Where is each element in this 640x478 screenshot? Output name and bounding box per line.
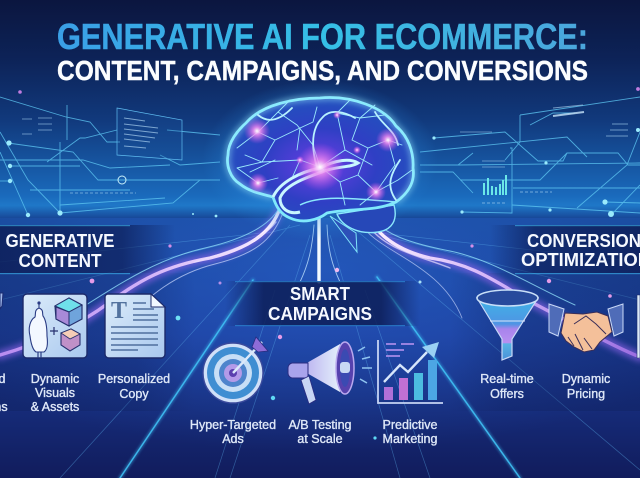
label: dynamic visuals and assets: & Assets: [31, 400, 79, 414]
circuit nodes: [6, 87, 640, 217]
label: predictive marketing: [383, 418, 437, 446]
brain: cerebrum outline: [228, 98, 413, 221]
label: predictive marketing: Predictive: [383, 418, 437, 432]
icon: handshake: [549, 304, 623, 352]
icon: dynamic visuals and assets: [23, 294, 87, 358]
sparkle nodes: [90, 244, 612, 440]
label: hyper-targeted ads: [190, 418, 276, 446]
heading: smart campaigns: SMART: [290, 284, 350, 304]
brain: stem: [330, 216, 357, 252]
mini data panels: [22, 105, 628, 203]
icon: target with arrow: [203, 337, 268, 403]
label: personalized copy: Copy: [119, 387, 149, 401]
label: personalized copy: Personalized: [98, 372, 170, 386]
label: hyper-targeted ads: Ads: [222, 432, 244, 446]
left panel: generative content backdrop: [0, 225, 195, 411]
label: dynamic pricing: [562, 372, 610, 401]
label: dynamic visuals and assets: Visuals: [35, 386, 75, 400]
brain: synapse glows: [296, 143, 344, 191]
heading: conversion optimization: [521, 231, 640, 270]
title: [57, 16, 588, 86]
label: a/b testing at scale: A/B Testing: [288, 418, 352, 432]
label: dynamic visuals and assets: Dynamic: [31, 372, 79, 386]
label: dynamic pricing: Pricing: [567, 387, 605, 401]
bright diagonal light beams: [120, 277, 520, 478]
heading: generative content: [6, 231, 114, 271]
label: a/b testing at scale: [288, 418, 352, 446]
label: personalized copy: [98, 372, 170, 401]
label: dynamic pricing: Dynamic: [562, 372, 610, 386]
icon: personalized copy document: [105, 294, 165, 358]
heading: generative content: CONTENT: [18, 251, 102, 271]
brain: [202, 80, 438, 252]
label: automated left fragment: [0, 372, 8, 414]
label: dynamic visuals and assets: [31, 372, 79, 414]
icon: partial left tile: [0, 293, 3, 309]
icon: personalized copy document: T: [111, 298, 127, 324]
right panel: conversion optimization backdrop: [450, 225, 640, 411]
heading: smart campaigns: [268, 284, 372, 324]
heading: generative content: GENERATIVE: [6, 231, 114, 251]
label: real-time offers: [480, 372, 534, 401]
circuit lines right: [420, 97, 640, 214]
brain: cerebellum: [337, 205, 395, 233]
icon: megaphone: [288, 342, 372, 404]
icon: funnel: [477, 290, 538, 360]
heading: smart campaigns: CAMPAIGNS: [268, 304, 372, 324]
icon: partial right tile: [637, 295, 640, 358]
smart campaigns banner: [225, 281, 420, 326]
brain: neural web: [237, 100, 412, 205]
perspective floor lines: [0, 225, 640, 478]
label: real-time offers: Real-time: [480, 372, 534, 386]
label: predictive marketing: Marketing: [383, 432, 437, 446]
label: a/b testing at scale: at Scale: [297, 432, 343, 446]
icon: predictive chart: [378, 340, 443, 403]
brain: gyrus contours: [258, 108, 400, 200]
data streams: [0, 205, 640, 357]
label: hyper-targeted ads: Hyper-Targeted: [190, 418, 276, 432]
circuit lines left: [0, 97, 220, 215]
label: real-time offers: Offers: [490, 387, 524, 401]
